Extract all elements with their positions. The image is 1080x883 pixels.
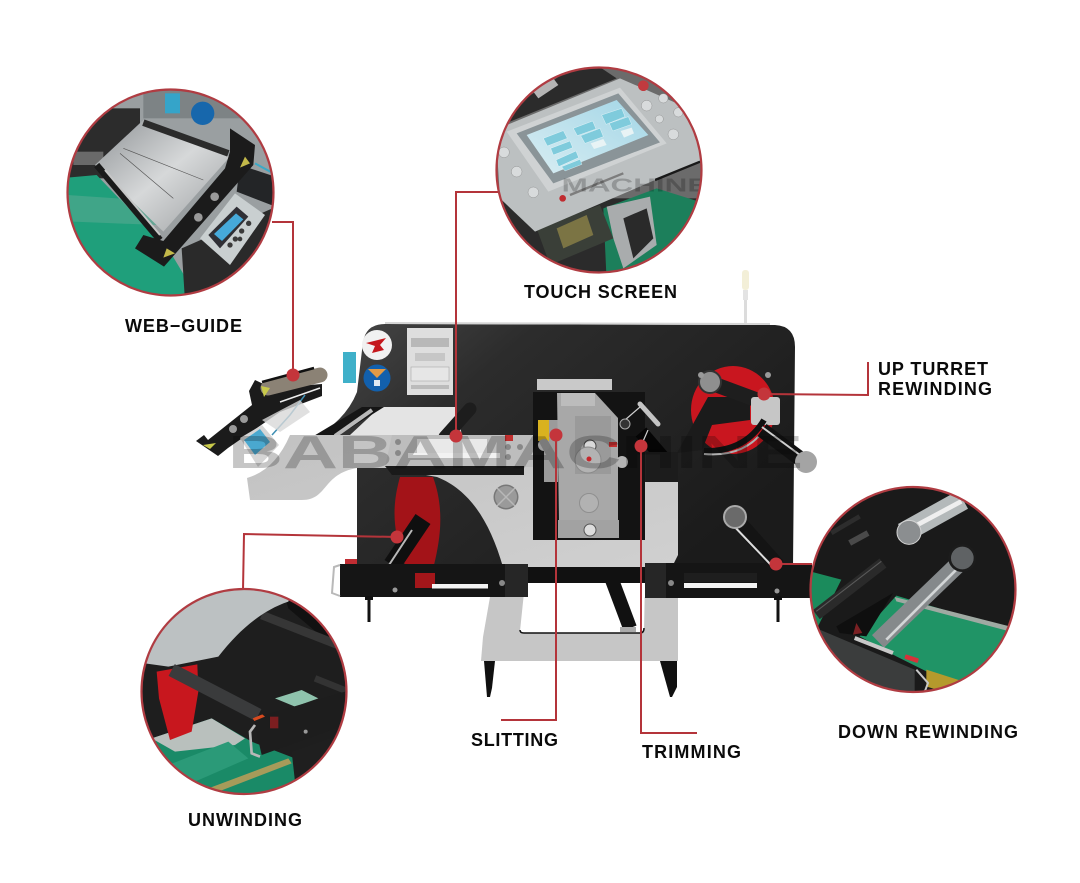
- lower roller: [609, 572, 636, 632]
- blue tag: [343, 352, 356, 383]
- left arm: [332, 559, 528, 597]
- callout: touch screen photo: MACHINE: [562, 175, 708, 196]
- opening edge: [520, 628, 644, 633]
- infographic: labelled machine diagram: [66, 66, 1017, 826]
- trimming blades: [620, 404, 678, 482]
- label: up turret rewinding: [878, 359, 992, 399]
- control panel: [385, 435, 533, 475]
- frame opening: [520, 583, 645, 633]
- arm feet: [365, 597, 782, 622]
- back panel: [310, 324, 795, 567]
- down rewinding shaft: [724, 506, 778, 566]
- unwind red disc: [395, 477, 440, 565]
- label: trimming: TRIMMING: [642, 742, 741, 762]
- label: down rewinding: DOWN REWINDING: [838, 722, 1018, 742]
- label: up turret rewinding: UP TURRET: [878, 359, 988, 379]
- guide plate: [350, 407, 462, 435]
- label: unwinding: UNWINDING: [188, 810, 302, 830]
- leader line: unwinding: [243, 530, 404, 590]
- leader line: touch screen: [450, 192, 498, 442]
- label: web-guide: WEB−GUIDE: [125, 316, 242, 336]
- gauge disc: [494, 484, 518, 510]
- light tower: [742, 270, 749, 325]
- turret red disc: [691, 366, 775, 454]
- slanted feed rollers: [312, 407, 470, 437]
- logo badge: [362, 330, 392, 360]
- label: up turret rewinding: REWINDING: [878, 379, 992, 399]
- lower frame: [481, 597, 678, 661]
- leader line: trimming: [634, 440, 697, 733]
- callout: down rewinding photo: [803, 483, 1023, 700]
- leader line: web-guide: [272, 222, 300, 382]
- document sheet: [407, 328, 453, 395]
- turret assembly: [677, 371, 817, 473]
- callout: web-guide photo: [60, 85, 280, 302]
- right arm: [645, 563, 812, 598]
- top trim: [385, 323, 770, 324]
- leader line: down rewinding: [770, 558, 812, 570]
- web guide unit: [196, 368, 322, 467]
- unwind shaft: [389, 519, 423, 565]
- label: slitting: SLITTING: [471, 730, 558, 750]
- grey frame: [247, 435, 678, 567]
- callout: touch screen photo: [490, 65, 710, 282]
- slitter recess: [533, 392, 645, 542]
- slitting head: [537, 379, 628, 538]
- safety badge: [364, 364, 390, 392]
- leader line: up turret rewinding: [758, 362, 868, 400]
- label: touch screen: TOUCH SCREEN: [524, 282, 677, 302]
- callout: unwinding photo: [135, 585, 355, 802]
- leader line: slitting: [501, 428, 562, 720]
- watermark: BABAMACHINE: [228, 426, 803, 478]
- machine: [196, 270, 817, 697]
- frame legs: [484, 661, 677, 697]
- center bar: [528, 567, 646, 583]
